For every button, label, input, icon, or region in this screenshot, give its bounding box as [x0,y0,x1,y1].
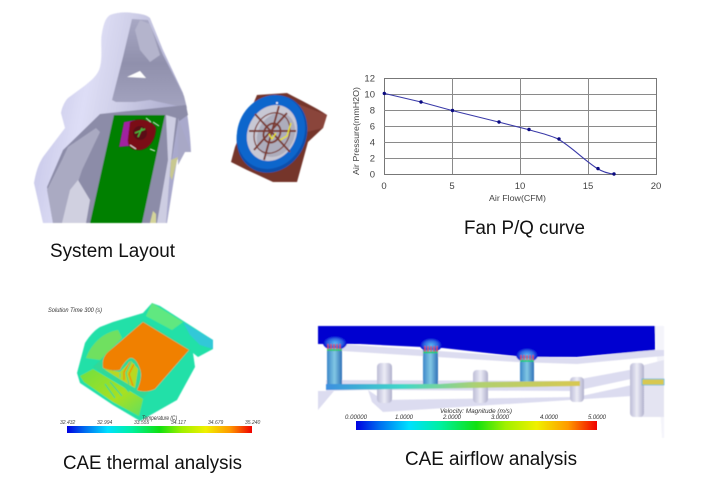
legend: temperature: 34.117 [171,420,186,426]
legend: temperature: 32.994 [97,420,113,426]
y axis ticks: 6 [370,122,375,132]
x axis ticks: 5 [449,181,455,192]
y axis ticks: 10 [364,90,375,100]
icon: blower fan [223,83,327,185]
legend: temperature: 33.555 [134,420,150,426]
icon: air duct [326,381,580,390]
data points [383,92,616,176]
legend: velocity: 5.0000 [588,415,607,421]
y axis ticks: 12 [364,74,375,84]
legend: velocity: 4.0000 [540,415,559,421]
x axis title: Air Flow(CFM) [489,193,546,203]
icon: support cylinders [377,363,392,403]
x axis ticks: 20 [651,181,661,192]
y axis ticks [364,74,375,180]
data curve [384,93,614,174]
legend: velocity: 3.0000 [491,415,510,421]
x axis ticks: 15 [583,181,593,192]
plot frame and grid [384,78,656,174]
icon: vent domes [323,336,347,350]
legend: temperature: 32.432 [60,420,76,426]
panel: lower back interior [47,105,188,223]
icon: vertical air columns [327,348,342,387]
panel: hot zone [103,322,189,391]
text: solution time: Solution Time 300 (s) [48,308,102,314]
y axis ticks: 0 [370,170,375,180]
panel: upper back interior [112,19,187,108]
x axis ticks [381,181,661,192]
x axis ticks: 10 [515,181,525,192]
legend: velocity: 2.0000 [442,415,462,421]
legend: temperature: Temperature (C) [142,416,177,422]
y axis ticks: 4 [370,138,375,148]
chart: fan P/Q curve [351,74,661,203]
image: seat system layout [34,12,191,223]
y axis ticks: 8 [370,106,375,116]
legend: velocity: 1.0000 [395,415,414,421]
y axis title: Air Pressure(mmH2O) [351,87,361,175]
legend: velocity [345,408,607,430]
caption: system layout: System Layout [50,241,176,262]
panel: blue velocity region [318,326,655,357]
legend: temperature [60,416,261,433]
legend: velocity: 0.00000 [345,415,368,421]
legend: temperature: 35.240 [245,420,261,426]
icon: red inlet pins [328,344,533,360]
legend: temperature: 34.679 [208,420,224,426]
image: CAE airflow duct [318,326,664,438]
icon: fan inside seat [119,118,159,151]
caption: CAE thermal analysis: CAE thermal analysis [63,453,242,474]
image: CAE thermal seat cushion [77,303,213,421]
x axis ticks: 0 [381,181,387,192]
caption: fan P/Q curve: Fan P/Q curve [464,218,585,239]
y axis ticks: 2 [370,154,375,164]
legend: velocity: Velocity: Magnitude (m/s) [440,408,512,415]
caption: CAE airflow analysis: CAE airflow analysis [405,449,577,470]
panel: green heater mat [90,115,165,223]
